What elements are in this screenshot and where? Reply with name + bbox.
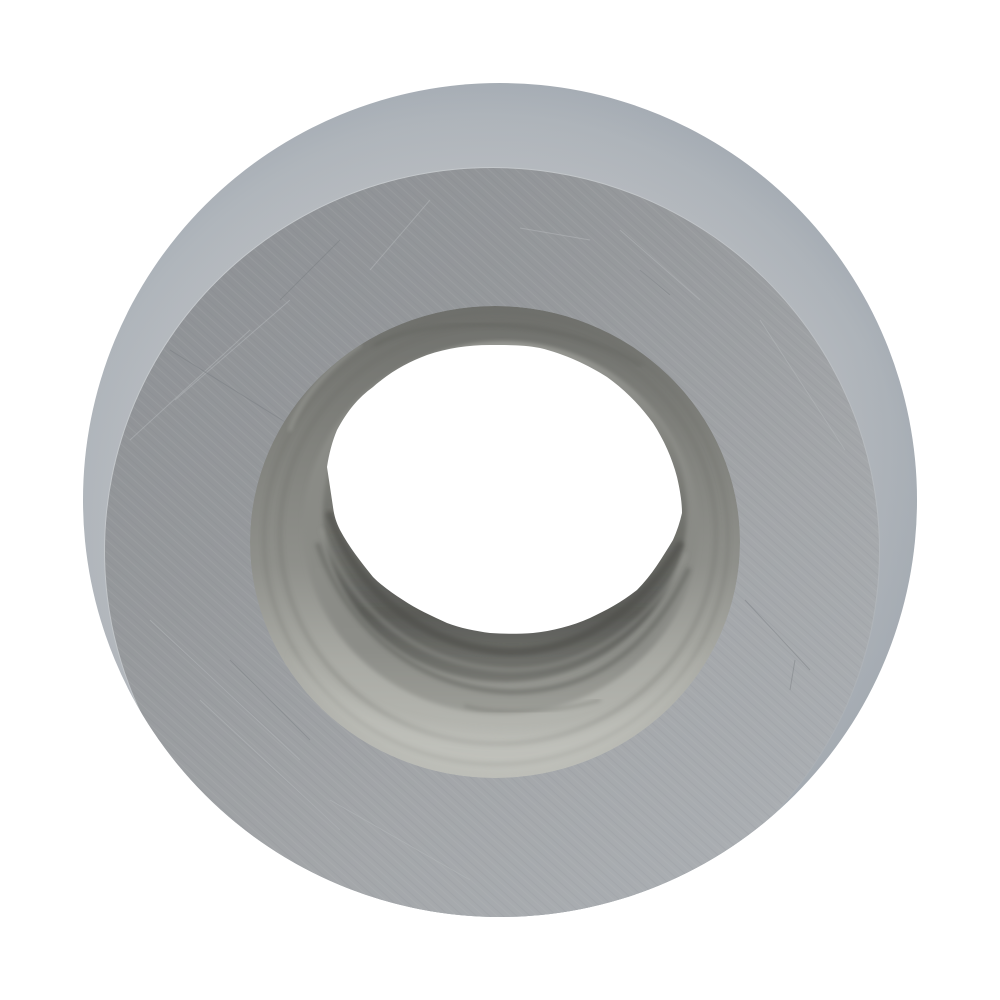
inner thread band	[303, 342, 699, 714]
through hole	[327, 345, 682, 634]
illustration: threaded metal ball nut, end view	[83, 83, 917, 917]
dark thread grooves	[323, 342, 687, 682]
outer domed body	[83, 83, 917, 917]
chamfer rings	[274, 574, 719, 765]
scratches	[130, 200, 845, 880]
bright lower crescent	[320, 684, 674, 766]
flat brushed end face	[104, 167, 880, 935]
brushed grain texture	[105, 168, 879, 934]
threaded bore	[250, 306, 740, 778]
